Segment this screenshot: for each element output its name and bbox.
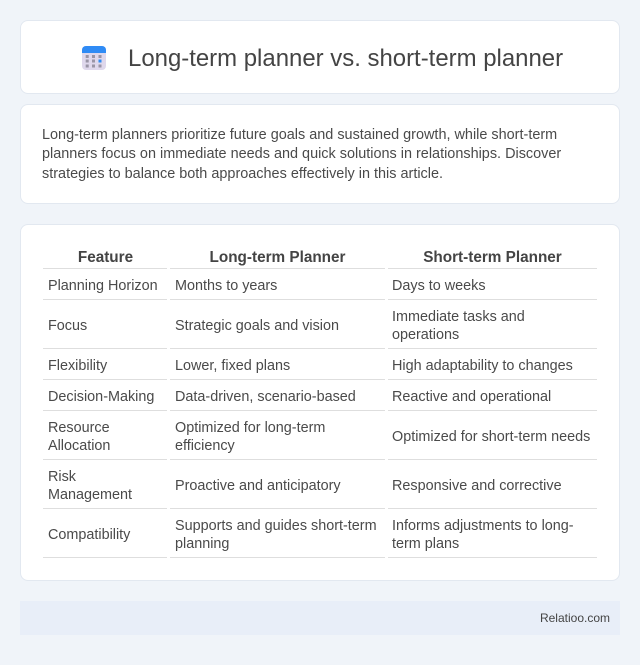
table rows: Risk xyxy=(48,469,76,485)
table rows: Reactive and operational xyxy=(392,389,551,405)
table header: Short-term Planner xyxy=(423,249,562,266)
table rows: Responsive and corrective xyxy=(392,478,562,494)
table rows: Lower, fixed plans xyxy=(175,358,290,374)
intro text: planners focus on immediate needs and quick solutions in relationships. Discover xyxy=(42,146,561,162)
table rows: Management xyxy=(48,487,132,503)
table rows: Data-driven, scenario-based xyxy=(175,389,356,405)
footer xyxy=(20,601,620,635)
table rows: Flexibility xyxy=(48,358,107,374)
table rows: operations xyxy=(392,327,459,343)
table rows: Supports and guides short-term xyxy=(175,518,377,534)
table rows: Focus xyxy=(48,318,87,334)
footer text: site name: Relatioo.com xyxy=(540,611,610,625)
panel: introduction xyxy=(20,104,620,204)
table rows: Immediate tasks and xyxy=(392,309,525,325)
table rows: Optimized for short-term needs xyxy=(392,429,590,445)
table rows: High adaptability to changes xyxy=(392,358,573,374)
intro text: strategies to balance both approaches effectively in this article. xyxy=(42,166,443,182)
icon: calendar xyxy=(82,46,106,70)
table rows: Allocation xyxy=(48,438,110,454)
table rows: Decision-Making xyxy=(48,389,154,405)
table rows: Proactive and anticipatory xyxy=(175,478,341,494)
table header: Long-term Planner xyxy=(210,249,345,266)
table header: Feature xyxy=(78,249,133,266)
intro text xyxy=(42,126,561,182)
table rows: Planning Horizon xyxy=(48,278,158,294)
table rows: planning xyxy=(175,536,229,552)
table rows: Informs adjustments to long- xyxy=(392,518,574,534)
table rows: Days to weeks xyxy=(392,278,486,294)
table rows: Optimized for long-term xyxy=(175,420,325,436)
panel: title card xyxy=(20,20,620,94)
table rows: Compatibility xyxy=(48,527,130,543)
table rows: Strategic goals and vision xyxy=(175,318,339,334)
table rows xyxy=(43,268,597,558)
table rows: Resource xyxy=(48,420,110,436)
table rows: efficiency xyxy=(175,438,235,454)
intro text: Long-term planners prioritize future goals and sustained growth, while short-term xyxy=(42,126,557,142)
table rows: Months to years xyxy=(175,278,277,294)
table header xyxy=(78,249,562,266)
title: Long-term planner vs. short-term planner xyxy=(128,45,563,72)
panel: comparison table xyxy=(20,224,620,581)
table rows: term plans xyxy=(392,536,459,552)
